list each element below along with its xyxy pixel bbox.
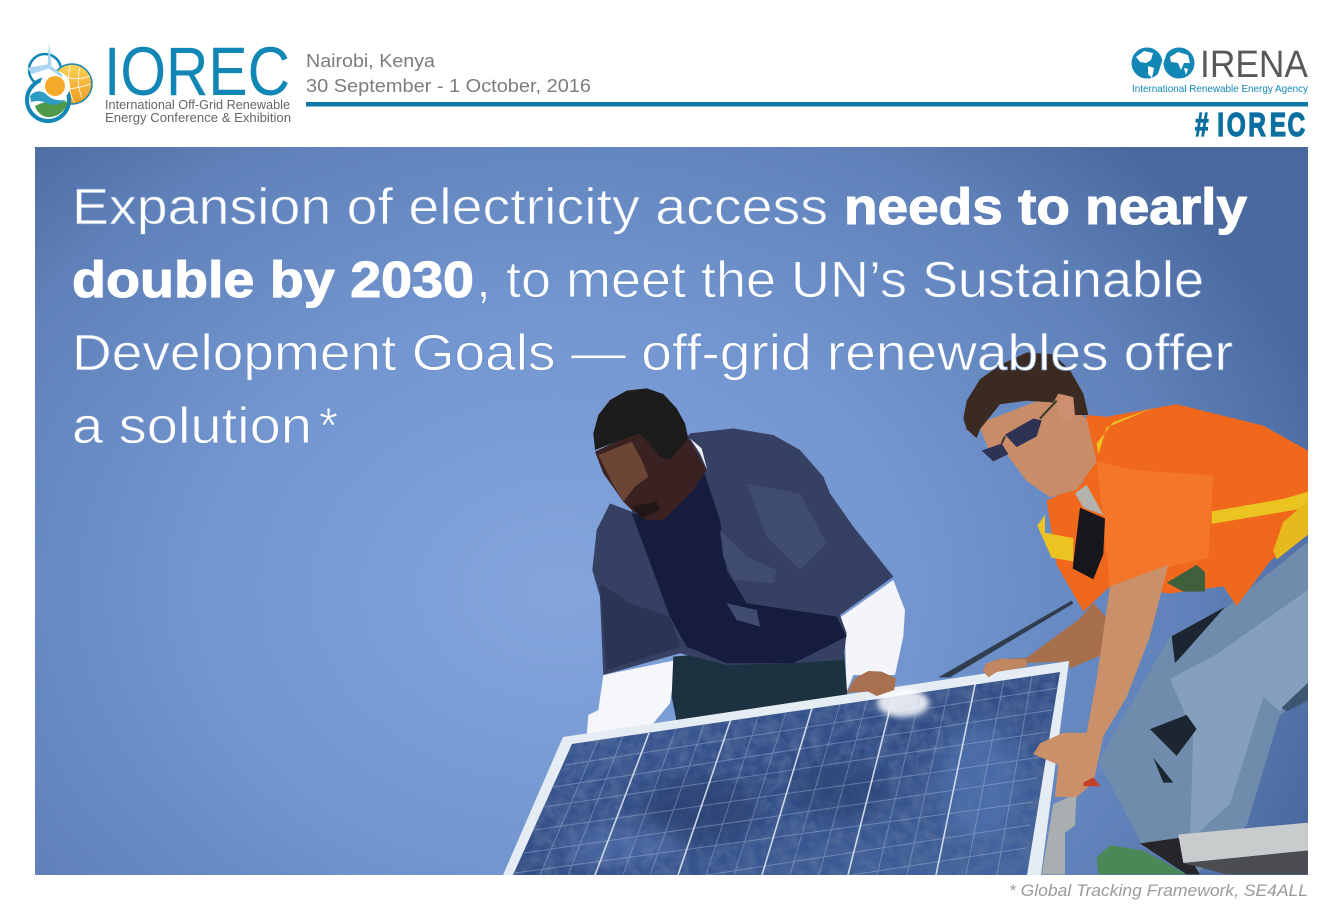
line 2	[72, 251, 1204, 308]
panel texture	[513, 672, 1060, 875]
headline	[72, 178, 1248, 454]
front arm	[1033, 565, 1168, 797]
line 2: double by 2030	[72, 251, 474, 308]
event location and date: Nairobi, Kenya	[306, 50, 436, 71]
photo panel: workers installing solar panel	[35, 147, 1308, 875]
line 2: , to meet the UN’s Sustainable	[476, 251, 1204, 308]
IOREC subtitle: International Off-Grid Renewable	[105, 98, 290, 112]
thin cell grid	[515, 676, 1058, 875]
IOREC wordmark: IOREC	[104, 33, 290, 110]
solar panel	[503, 661, 1069, 875]
panel cells	[513, 672, 1060, 875]
line 4: *	[319, 397, 338, 454]
IOREC subtitle	[105, 98, 291, 125]
person: man in navy sweater	[587, 388, 905, 737]
header: IOREC logo	[27, 33, 291, 125]
glare	[877, 689, 929, 717]
rod behind worker	[938, 601, 1073, 677]
person: man in orange shirt	[963, 352, 1308, 874]
line 4: a solution	[72, 397, 312, 454]
icon: IRENA infinity globes	[1132, 48, 1194, 78]
bus bars	[595, 680, 976, 875]
icon: IOREC emblem	[27, 42, 92, 121]
IRENA wordmark: IRENA	[1200, 44, 1309, 86]
hashtag: #IOREC	[1195, 108, 1305, 144]
line 1: Expansion of electricity access	[72, 178, 828, 235]
IRENA full name: International Renewable Energy Agency	[1132, 83, 1309, 95]
sky background	[35, 147, 1308, 875]
event location and date: 30 September - 1 October, 2016	[306, 75, 591, 96]
shoe	[1097, 845, 1187, 874]
metal rail	[1178, 823, 1308, 863]
person: back arm of man in orange	[983, 602, 1110, 668]
IRENA logo	[1132, 44, 1309, 95]
line 1	[72, 178, 1248, 235]
hand: navy-sweater worker on panel edge	[847, 671, 896, 696]
source footnote: * Global Tracking Framework, SE4ALL	[1009, 881, 1308, 900]
panel frame	[503, 661, 1069, 875]
support pole	[1042, 793, 1077, 874]
safety harness	[1037, 408, 1308, 561]
orange shirt	[1047, 404, 1308, 611]
pliers	[1083, 777, 1101, 786]
line 1: needs to nearly	[844, 178, 1248, 235]
IOREC subtitle: Energy Conference & Exhibition	[105, 111, 291, 125]
panel shading	[560, 720, 1020, 863]
hand on panel edge	[983, 659, 1027, 677]
header rule	[306, 102, 1308, 106]
line 3: Development Goals — off-grid renewables offer	[72, 324, 1233, 381]
event location and date	[306, 50, 591, 96]
head	[978, 394, 1097, 497]
jeans	[1098, 542, 1308, 874]
